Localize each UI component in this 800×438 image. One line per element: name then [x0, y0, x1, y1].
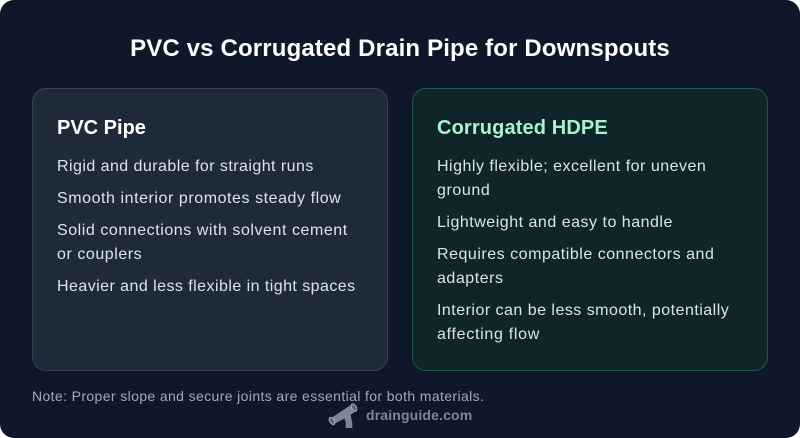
logo: drainguide.com [328, 403, 472, 428]
heading: Corrugated HDPE: Corrugated HDPE [437, 117, 608, 139]
text: rigid and durable: Rigid and durable for straight runs [57, 158, 314, 175]
panel: corrugated HDPE [412, 88, 768, 371]
panel: PVC pipe [32, 88, 388, 371]
icon: pipe [328, 403, 358, 428]
text: solid connections: or couplers [57, 246, 142, 263]
text: highly flexible [437, 158, 706, 199]
heading: PVC Pipe: PVC Pipe [57, 117, 146, 139]
text: solid connections: Solid connections with solvent cement [57, 222, 348, 239]
text: interior less smooth: Interior can be less smooth, potentially [437, 302, 729, 319]
text: compatible connectors: adapters [437, 270, 504, 287]
text: lightweight: Lightweight and easy to handle [437, 214, 673, 231]
text: interior less smooth: affecting flow [437, 326, 540, 343]
text: heavier: Heavier and less flexible in tight spaces [57, 278, 356, 295]
text: solid connections [57, 222, 348, 263]
text: interior less smooth [437, 302, 729, 343]
text: highly flexible: Highly flexible; excellent for uneven [437, 158, 706, 175]
text: highly flexible: ground [437, 182, 490, 199]
note: Note: Proper slope and secure joints are essential for both materials. [32, 388, 484, 404]
text: compatible connectors [437, 246, 714, 287]
text: compatible connectors: Requires compatible connectors and [437, 246, 714, 263]
text: smooth interior: Smooth interior promotes steady flow [57, 190, 341, 207]
title: PVC vs Corrugated Drain Pipe for Downspouts [130, 35, 670, 62]
logo text: drainguide.com [366, 407, 472, 423]
